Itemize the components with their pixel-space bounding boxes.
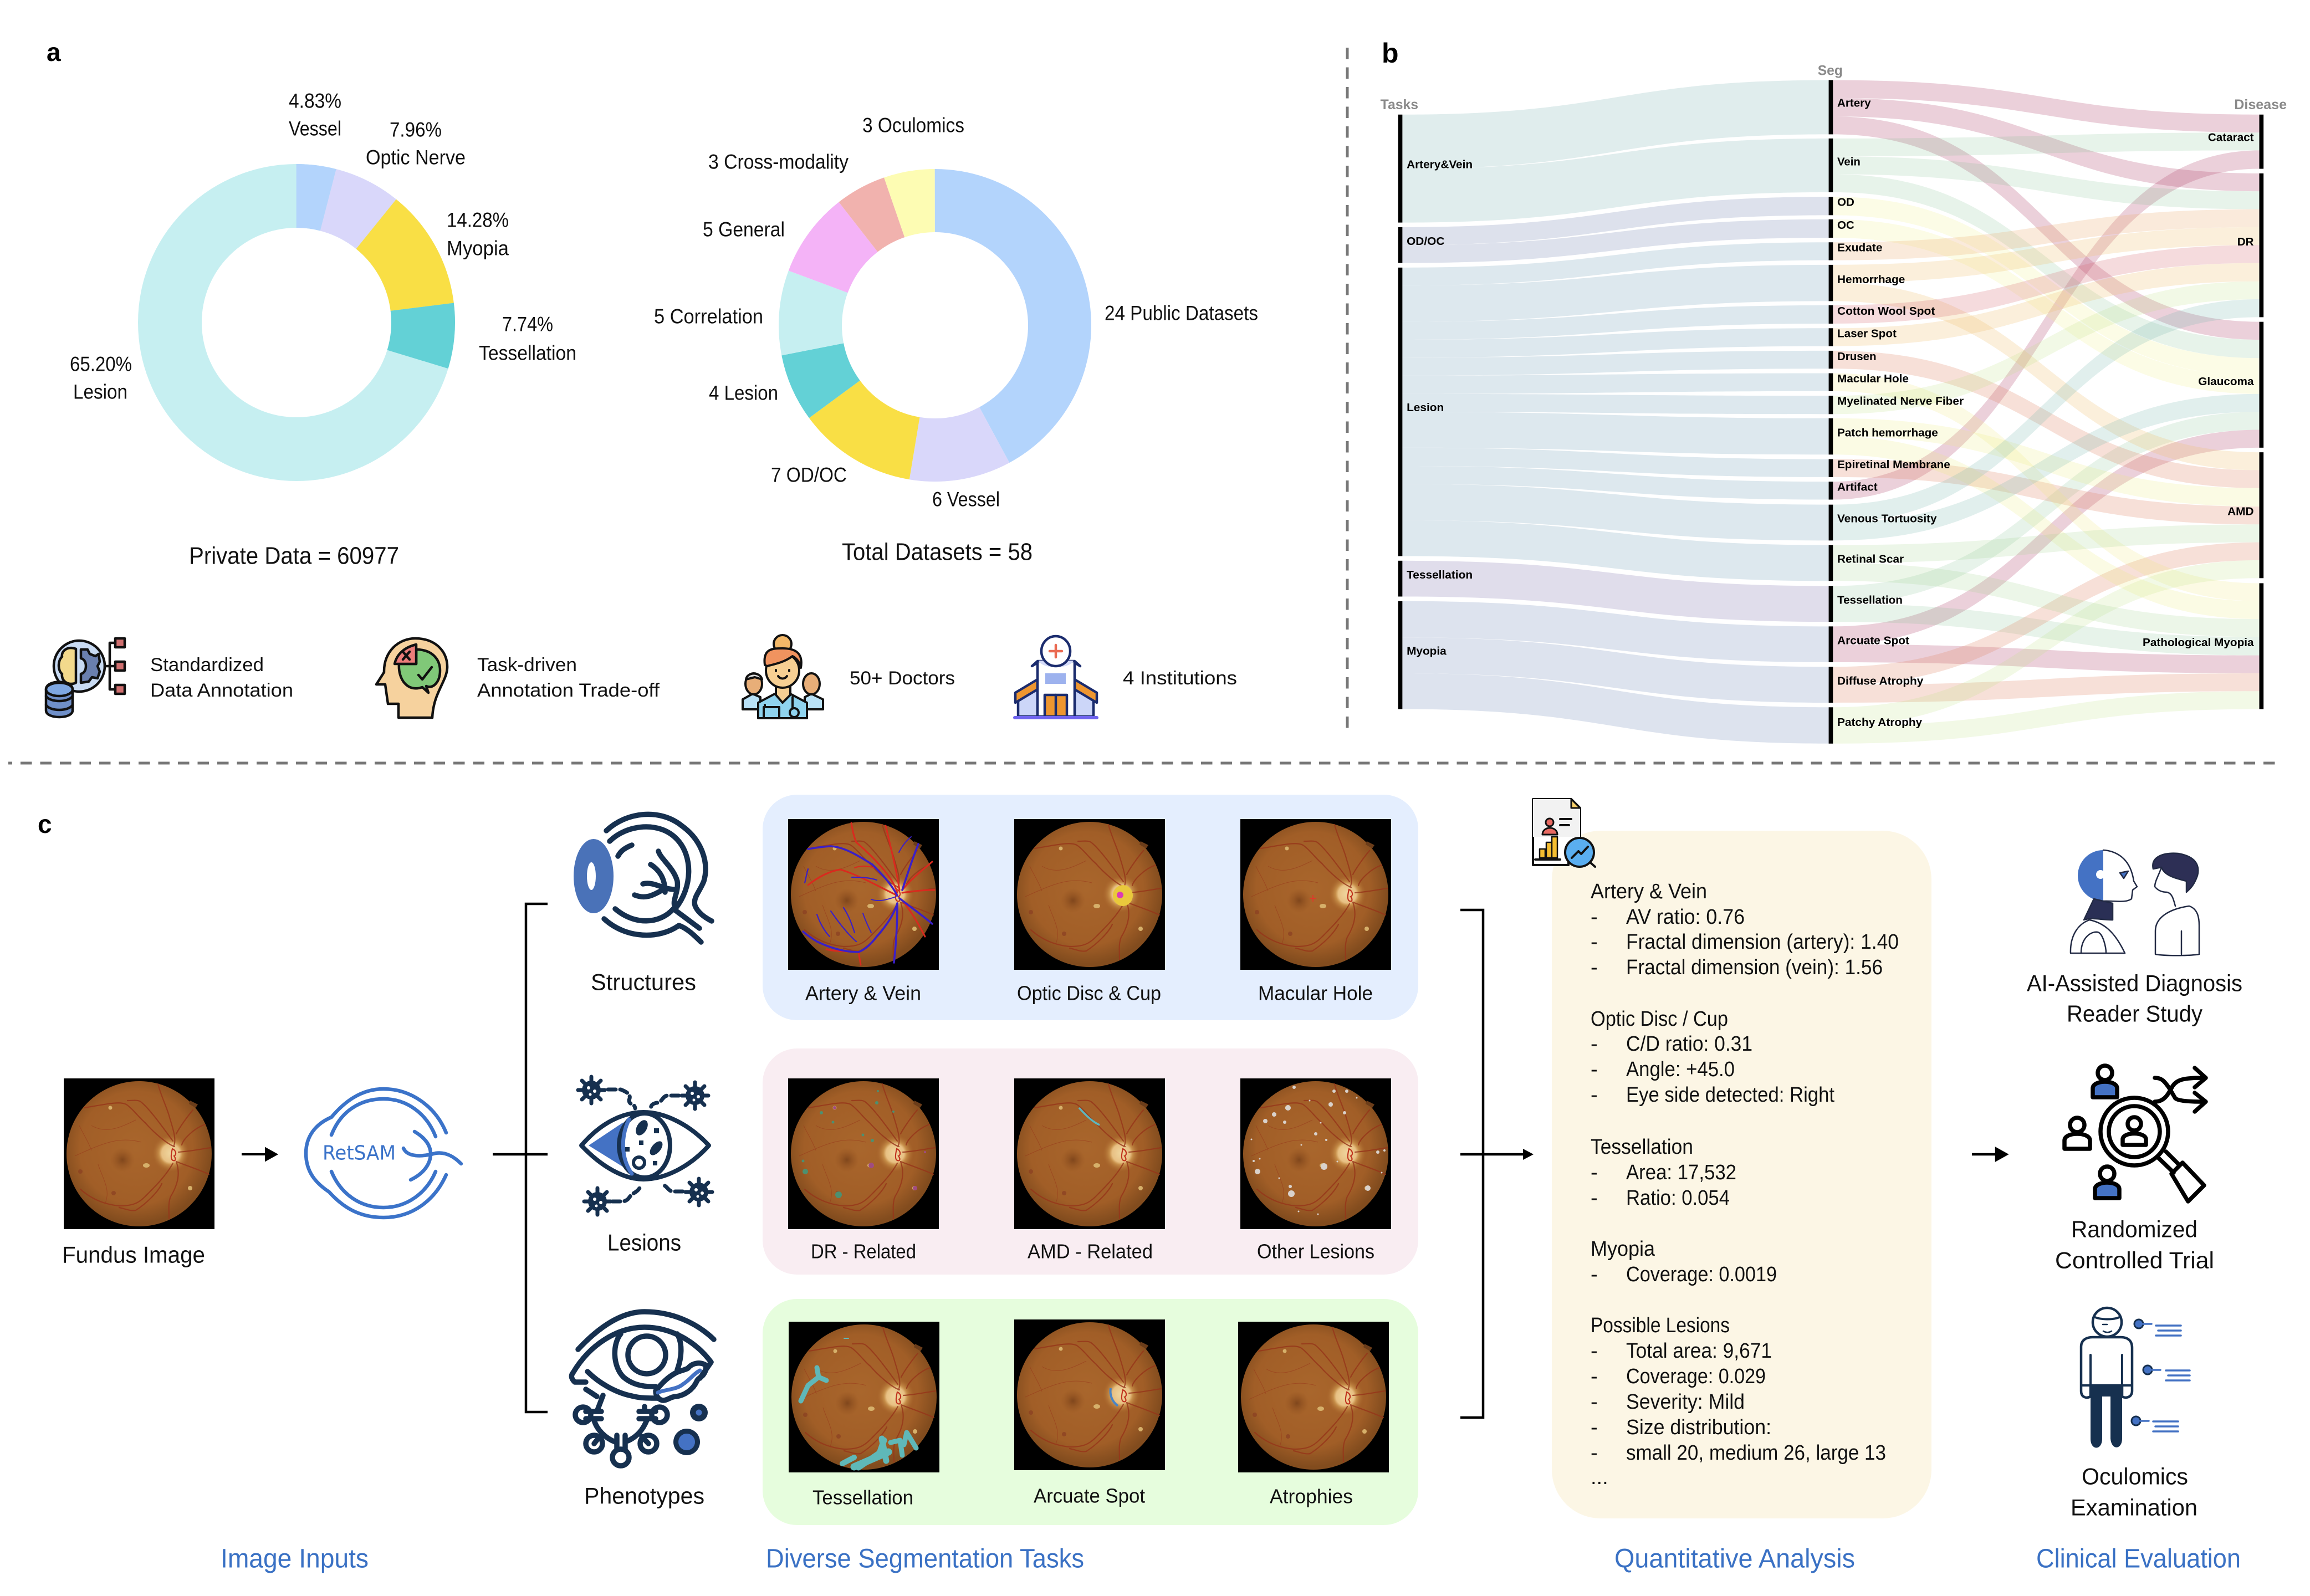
icon: AI-assisted reader study	[2071, 850, 2199, 955]
label: other lesions: Other Lesions	[1257, 1240, 1374, 1262]
metrics: possible lesions: Severity: Mild	[1626, 1390, 1745, 1414]
label: arcuate spot: Arcuate Spot	[1034, 1484, 1145, 1507]
panel: quantitative analysis	[1552, 831, 1931, 1518]
label: oculomics examination: Oculomics	[2082, 1463, 2188, 1490]
metrics: artery and vein: AV ratio: 0.76	[1626, 906, 1745, 929]
metrics: possible lesions: Coverage: 0.029	[1626, 1365, 1766, 1388]
metrics: possible lesions: -	[1591, 1365, 1598, 1388]
label: structures: Structures	[591, 969, 696, 995]
sankey labels: disease	[2143, 131, 2254, 649]
heading: clinical evaluation: Clinical Evaluation	[2036, 1544, 2241, 1574]
metrics: possible lesions: ...	[1591, 1466, 1608, 1489]
donut labels: private data: 14.28%	[447, 208, 509, 232]
sankey links: tasks to segmentation	[1402, 80, 1829, 744]
panel a	[46, 38, 1258, 718]
metrics: tessellation: -	[1591, 1186, 1598, 1210]
label: AMD related: AMD - Related	[1028, 1240, 1153, 1262]
icon: doctors	[743, 635, 823, 718]
sankey labels: segmentation: Patch hemorrhage	[1837, 427, 1938, 439]
icon: analysis report	[1533, 799, 1595, 867]
label: DR related: DR - Related	[811, 1240, 916, 1262]
sankey labels: tasks	[1407, 158, 1473, 658]
sankey links: segmentation to disease	[1833, 80, 2259, 744]
label: task-driven annotation trade-off	[477, 654, 660, 701]
image: optic disc and cup	[1014, 819, 1165, 970]
sankey labels: segmentation: Patchy Atrophy	[1837, 716, 1923, 729]
metrics: possible lesions: -	[1591, 1441, 1598, 1465]
label: standardized data annotation: Standardized	[150, 654, 264, 676]
sankey labels: tasks: Tessellation	[1407, 569, 1473, 581]
label: oculomics examination: Examination	[2071, 1494, 2197, 1521]
donut labels: private data: 65.20%	[70, 352, 132, 376]
metrics: optic disc and cup: Eye side detected: Right	[1626, 1083, 1834, 1107]
metrics: artery and vein: -	[1591, 906, 1598, 929]
donut chart: public datasets	[810, 201, 1060, 450]
sankey labels: tasks: Artery&Vein	[1407, 158, 1473, 171]
donut labels: private data	[70, 90, 576, 403]
metrics: possible lesions: -	[1591, 1390, 1598, 1414]
icon: task-driven head	[376, 638, 447, 718]
donut labels: private data: 7.74%	[502, 313, 553, 336]
sankey labels: segmentation: Cotton Wool Spot	[1837, 305, 1935, 318]
sankey labels: segmentation: Exudate	[1837, 242, 1883, 254]
sankey labels: segmentation: Hemorrhage	[1837, 273, 1905, 286]
logo: RetSAM: RetSAM	[323, 1142, 396, 1165]
label: randomized controlled trial: Controlled Trial	[2055, 1247, 2214, 1273]
image: tessellation	[789, 1322, 939, 1472]
sankey column headers: Tasks	[1381, 98, 1418, 112]
sankey labels: disease: AMD	[2227, 505, 2254, 518]
image: atrophies	[1238, 1322, 1389, 1472]
arrowhead: to quantitative analysis	[1523, 1149, 1534, 1160]
label: AI-assisted diagnosis reader study	[2027, 970, 2242, 1026]
donut labels: private data: Myopia	[447, 237, 509, 259]
label: fundus image: Fundus Image	[62, 1241, 205, 1268]
donut labels: private data: Lesion	[73, 380, 127, 403]
label: macular hole: Macular Hole	[1258, 982, 1373, 1004]
fundus image input	[64, 1078, 214, 1229]
donut labels: public datasets: 6 Vessel	[932, 488, 1000, 511]
donut labels: private data: Vessel	[289, 117, 341, 140]
donut labels: public datasets: 7 OD/OC	[771, 463, 847, 487]
metrics: tessellation: Area: 17,532	[1626, 1161, 1736, 1184]
metrics: possible lesions: -	[1591, 1339, 1598, 1363]
connector: bracket to quantitative analysis	[1460, 910, 1525, 1418]
sankey column headers	[1381, 63, 2287, 112]
panel label c: c	[38, 810, 52, 838]
icon: phenotypes	[571, 1312, 714, 1466]
icon: randomized controlled trial	[2064, 1066, 2206, 1201]
metrics: artery and vein: Fractal dimension (vein): 1.56	[1626, 956, 1883, 979]
panel label a: a	[47, 38, 61, 66]
donut labels: public datasets: 5 Correlation	[654, 305, 763, 328]
metrics: possible lesions: -	[1591, 1416, 1598, 1439]
donut labels: public datasets: 24 Public Datasets	[1105, 301, 1258, 325]
image: other lesions	[1240, 1078, 1391, 1229]
sankey labels: segmentation: OD	[1837, 196, 1854, 209]
caption: total datasets: Total Datasets = 58	[842, 539, 1033, 565]
icon: structures	[574, 814, 712, 942]
metrics: possible lesions	[1591, 1314, 1886, 1489]
sankey labels: segmentation: Myelinated Nerve Fiber	[1837, 395, 1964, 408]
panel: phenotype tasks	[763, 1299, 1418, 1525]
metrics: optic disc and cup: -	[1591, 1083, 1598, 1107]
label: artery and vein: Artery & Vein	[805, 982, 921, 1004]
panel b: sankey diagram	[1381, 63, 2287, 744]
sankey labels: segmentation: Artifact	[1837, 481, 1878, 494]
donut labels: private data: 4.83%	[289, 90, 341, 112]
panel label b: b	[1382, 38, 1399, 69]
image: AMD related	[1014, 1078, 1165, 1229]
donut labels: public datasets	[654, 114, 1258, 511]
metrics: optic disc and cup: C/D ratio: 0.31	[1626, 1032, 1752, 1056]
image: artery and vein	[788, 819, 939, 970]
sankey labels: segmentation: Retinal Scar	[1837, 553, 1904, 566]
sankey labels: segmentation: Artery	[1837, 97, 1871, 110]
metrics: myopia: Coverage: 0.0019	[1626, 1263, 1777, 1286]
metrics: tessellation	[1591, 1135, 1736, 1210]
label: AI-assisted diagnosis reader study: AI-Assisted Diagnosis	[2027, 970, 2242, 996]
sankey column headers: Disease	[2234, 98, 2287, 112]
metrics: possible lesions: small 20, medium 26, large 13	[1626, 1441, 1886, 1465]
arrow: to clinical evaluation	[1972, 1149, 2006, 1160]
sankey labels: segmentation: Diffuse Atrophy	[1837, 675, 1924, 688]
sankey labels: disease: DR	[2237, 236, 2254, 248]
divider: horizontal dashed line	[8, 761, 2279, 765]
donut labels: public datasets: 5 General	[703, 218, 785, 241]
panel: lesion tasks	[763, 1048, 1418, 1275]
heading: image inputs: Image Inputs	[221, 1544, 369, 1574]
heading: quantitative analysis: Quantitative Analysis	[1614, 1544, 1855, 1574]
caption: private data: Private Data = 60977	[189, 542, 399, 570]
label: randomized controlled trial: Randomized	[2071, 1216, 2197, 1242]
sankey column headers: Seg	[1818, 63, 1843, 79]
metrics: possible lesions: Possible Lesions	[1591, 1314, 1730, 1337]
logo: RetSAM	[306, 1089, 461, 1218]
label: standardized data annotation: Data Annotation	[150, 680, 293, 701]
image: DR related	[788, 1078, 939, 1229]
metrics: possible lesions: Size distribution:	[1626, 1416, 1771, 1439]
label: tessellation: Tessellation	[812, 1486, 913, 1508]
label: phenotypes: Phenotypes	[584, 1483, 704, 1508]
metrics: optic disc and cup: Angle: +45.0	[1626, 1058, 1735, 1081]
sankey labels: segmentation	[1837, 97, 1964, 729]
label: optic disc and cup: Optic Disc & Cup	[1017, 982, 1161, 1004]
label: oculomics examination	[2071, 1463, 2197, 1521]
donut labels: private data: Optic Nerve	[366, 146, 466, 168]
sankey labels: segmentation: Drusen	[1837, 350, 1877, 363]
donut labels: private data: 7.96%	[390, 119, 442, 141]
metrics: artery and vein: Fractal dimension (artery): 1.40	[1626, 930, 1899, 954]
sankey labels: segmentation: Epiretinal Membrane	[1837, 458, 1950, 471]
donut labels: public datasets: 3 Cross-modality	[708, 151, 849, 173]
metrics: optic disc and cup: -	[1591, 1058, 1598, 1081]
metrics: artery and vein: -	[1591, 956, 1598, 979]
sankey labels: segmentation: OC	[1837, 219, 1854, 232]
sankey labels: segmentation: Laser Spot	[1837, 328, 1897, 340]
donut labels: public datasets: 3 Oculomics	[862, 114, 964, 136]
label: lesions: Lesions	[607, 1229, 681, 1256]
metrics: artery and vein	[1591, 880, 1899, 979]
sankey labels: disease: Glaucoma	[2198, 375, 2254, 388]
sankey labels: tasks: Myopia	[1407, 645, 1447, 658]
donut labels: public datasets: 4 Lesion	[709, 381, 778, 405]
metrics: artery and vein: -	[1591, 930, 1598, 954]
label: atrophies: Atrophies	[1270, 1485, 1353, 1507]
metrics: optic disc and cup: -	[1591, 1032, 1598, 1056]
icon: oculomics examination	[2081, 1308, 2190, 1447]
sankey labels: segmentation: Tessellation	[1837, 594, 1903, 607]
label: 50+ doctors: 50+ Doctors	[850, 668, 955, 689]
icon: standardized data annotation	[46, 638, 125, 717]
label: 4 institutions: 4 Institutions	[1123, 668, 1237, 689]
metrics: possible lesions: Total area: 9,671	[1626, 1339, 1772, 1363]
sankey labels: tasks: OD/OC	[1407, 235, 1444, 248]
metrics: optic disc and cup	[1591, 1007, 1834, 1107]
label: task-driven annotation trade-off: Task-driven	[477, 654, 577, 676]
sankey labels: segmentation: Macular Hole	[1837, 372, 1909, 385]
metrics: artery and vein: Artery & Vein	[1591, 880, 1707, 903]
donut labels: private data: Tessellation	[479, 341, 576, 365]
metrics: tessellation: Ratio: 0.054	[1626, 1186, 1730, 1210]
metrics: myopia: Myopia	[1591, 1237, 1655, 1261]
label: task-driven annotation trade-off: Annotation Trade-off	[477, 680, 660, 701]
sankey labels: segmentation: Vein	[1837, 156, 1861, 168]
metrics: tessellation: Tessellation	[1591, 1135, 1693, 1159]
metrics: myopia	[1591, 1237, 1777, 1286]
icon: hospital	[1015, 636, 1097, 718]
metrics: tessellation: -	[1591, 1161, 1598, 1184]
sankey labels: disease: Cataract	[2208, 131, 2254, 144]
image: arcuate spot	[1014, 1319, 1165, 1470]
divider: vertical dashed line	[1346, 48, 1349, 735]
image: macular hole	[1240, 819, 1391, 970]
arrow: fundus to RetSAM	[242, 1149, 276, 1160]
metrics: optic disc and cup: Optic Disc / Cup	[1591, 1007, 1728, 1031]
connector: bracket to three branches	[493, 904, 548, 1412]
icon: lesions	[578, 1077, 712, 1215]
label: randomized controlled trial	[2055, 1216, 2214, 1273]
label: AI-assisted diagnosis reader study: Reader Study	[2067, 1001, 2202, 1026]
sankey labels: tasks: Lesion	[1407, 401, 1444, 414]
sankey labels: segmentation: Arcuate Spot	[1837, 635, 1909, 647]
panel: structures tasks	[763, 795, 1418, 1020]
label: standardized data annotation	[150, 654, 293, 701]
sankey labels: segmentation: Venous Tortuosity	[1837, 513, 1937, 525]
heading: diverse segmentation tasks: Diverse Segmentation Tasks	[766, 1544, 1084, 1574]
donut chart: private data	[170, 196, 423, 449]
sankey nodes	[1398, 80, 2263, 744]
sankey labels: disease: Pathological Myopia	[2143, 636, 2254, 649]
metrics: myopia: -	[1591, 1263, 1598, 1286]
